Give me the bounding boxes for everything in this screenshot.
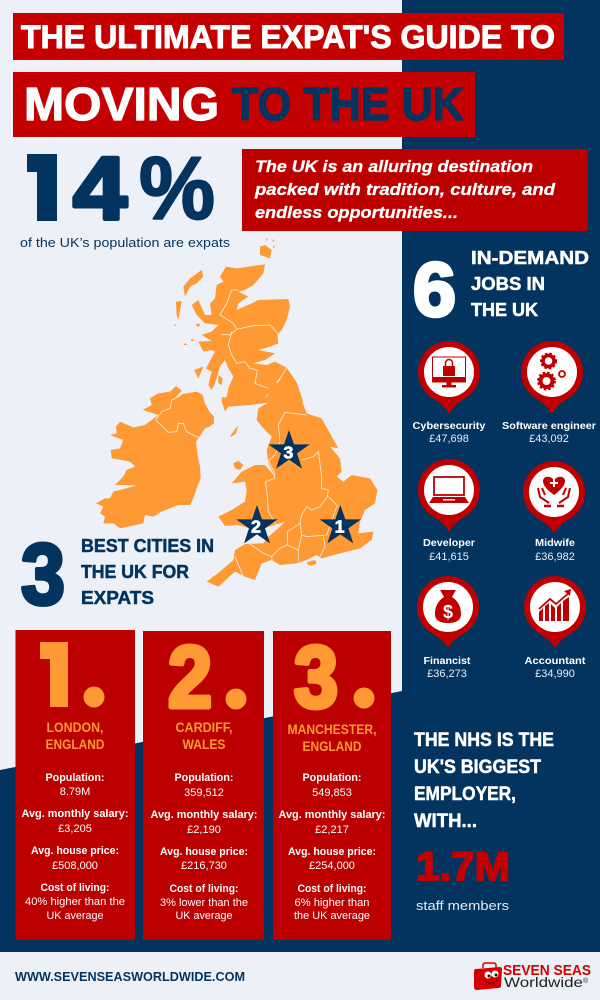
callout: intro text: endless opportunities... — [255, 203, 458, 222]
Cardiff stats: Avg. house price: — [160, 846, 248, 858]
job: Cybersecurity: Cybersecurity — [412, 420, 486, 432]
callout: NHS employer: EMPLOYER, — [414, 784, 516, 805]
heading: 3 best cities — [21, 527, 214, 623]
Cardiff stats: UK average — [176, 910, 232, 922]
statistic: 14 percent: of the UK’s population are expats — [20, 235, 231, 250]
Cardiff stats: £2,190 — [187, 824, 221, 836]
Manchester stats: Cost of living: — [298, 883, 366, 895]
logo: Seven Seas Worldwide: ® — [583, 977, 589, 985]
logo: Seven Seas Worldwide: Worldwide — [504, 974, 583, 990]
panel: London: ENGLAND — [46, 736, 104, 752]
callout: NHS employer: staff members — [416, 899, 509, 913]
number 3: 3 — [294, 629, 338, 726]
footer website: WWW.SEVENSEASWORLDWIDE.COM — [15, 969, 245, 984]
statistic: 14 percent: % — [139, 138, 215, 238]
panel: London: LONDON, — [46, 719, 104, 735]
map: Scottish islands — [174, 238, 275, 385]
job: Financist: Financist — [424, 655, 471, 667]
Manchester stats: Avg. monthly salary: — [278, 809, 386, 821]
job: Software engineer: Software engineer — [502, 420, 596, 432]
number 3 — [294, 629, 374, 726]
London stats: £508,000 — [52, 860, 98, 872]
Cardiff stats — [150, 772, 258, 922]
London stats: Avg. house price: — [31, 845, 119, 857]
panel: Manchester — [273, 629, 391, 940]
Cardiff stats: £216,730 — [181, 860, 227, 872]
title line 2: TO THE UK — [232, 78, 464, 130]
panel: London — [16, 627, 135, 940]
Cardiff stats: Cost of living: — [170, 883, 238, 895]
number 1 — [34, 627, 104, 724]
number 1: 1 — [41, 627, 67, 724]
panel: Cardiff — [143, 629, 264, 940]
job: Accountant — [524, 576, 586, 680]
star marker 1 — [320, 505, 361, 543]
icon: hands holding heart — [523, 461, 585, 533]
job: Midwife: Midwife — [535, 537, 575, 549]
map: England and Wales — [207, 383, 377, 587]
job: Software engineer — [502, 341, 596, 445]
Manchester stats: the UK average — [294, 910, 370, 922]
job: Developer: Developer — [423, 537, 475, 549]
heading: 6 in-demand jobs: IN-DEMAND — [471, 248, 589, 268]
London stats: Avg. monthly salary: — [22, 808, 128, 820]
Manchester stats: 549,853 — [312, 787, 352, 799]
job: Financist: £36,273 — [427, 668, 467, 680]
heading: 3 best cities: BEST CITIES IN — [81, 536, 214, 556]
panel: Manchester: ENGLAND — [302, 738, 362, 754]
heading: 6 in-demand jobs: 6 — [413, 248, 456, 333]
job: Developer: £41,615 — [429, 551, 469, 563]
map of the UK and Ireland — [96, 238, 377, 587]
statistic: 14 percent: 4 — [73, 138, 128, 238]
number 2 — [168, 629, 246, 726]
London stats — [22, 772, 128, 922]
callout: intro text: packed with tradition, culture, and — [254, 180, 556, 199]
heading: 6 in-demand jobs — [413, 248, 589, 333]
job: Midwife — [523, 461, 585, 563]
Manchester stats: £254,000 — [309, 860, 355, 872]
callout: NHS employer: 1.7M — [416, 845, 510, 889]
job: Midwife: £36,982 — [535, 551, 575, 563]
heading: 3 best cities: 3 — [21, 527, 65, 623]
heading: 3 best cities: THE UK FOR — [81, 562, 189, 582]
callout: NHS employer: UK'S BIGGEST — [414, 757, 541, 778]
Cardiff stats: Avg. monthly salary: — [150, 809, 258, 821]
London stats: Population: — [46, 772, 104, 784]
heading: 6 in-demand jobs: JOBS IN — [471, 274, 545, 294]
panel: Cardiff: CARDIFF, — [176, 719, 232, 735]
statistic: 14 percent — [20, 138, 231, 250]
title line 2: MOVING — [24, 78, 219, 130]
star marker 3 — [268, 430, 310, 469]
star marker 3: 3 — [283, 442, 293, 462]
icon: gears — [521, 341, 583, 414]
icon: red suitcase — [474, 963, 502, 990]
icon: monitor with padlock — [418, 341, 480, 414]
Manchester stats: Avg. house price: — [288, 846, 376, 858]
job: Financist — [417, 576, 479, 680]
heading: 3 best cities: EXPATS — [81, 588, 154, 608]
job: Software engineer: £43,092 — [529, 433, 569, 445]
Manchester stats — [278, 772, 386, 922]
London stats: Cost of living: — [40, 882, 110, 894]
Cardiff stats: Population: — [174, 772, 234, 784]
logo: Seven Seas Worldwide — [474, 963, 591, 990]
callout: NHS employer: WITH... — [414, 811, 477, 832]
London stats: UK average — [46, 910, 104, 922]
Cardiff stats: 3% lower than the — [160, 897, 248, 909]
Manchester stats: £2,217 — [315, 824, 349, 836]
job: Developer — [418, 459, 480, 563]
London stats: £3,205 — [58, 823, 92, 835]
job: Cybersecurity: £47,698 — [429, 433, 469, 445]
title — [13, 13, 564, 137]
icon: rising bar chart — [524, 576, 586, 648]
map: Ireland — [96, 386, 214, 528]
Cardiff stats: 359,512 — [184, 787, 224, 799]
callout: intro text — [242, 149, 588, 231]
job: Accountant: £34,990 — [535, 668, 575, 680]
map: Scotland — [174, 238, 303, 405]
statistic: 14 percent: 1 — [28, 138, 74, 238]
Manchester stats: 6% higher than — [294, 897, 370, 909]
map: Galloway, Isle of Man, Anglesey, Isle of Wight — [222, 397, 317, 566]
panel: Cardiff: WALES — [182, 736, 226, 752]
number 2: 2 — [168, 629, 212, 726]
Manchester stats: Population: — [302, 772, 362, 784]
title line 2 — [13, 72, 475, 137]
heading: 6 in-demand jobs: THE UK — [471, 300, 538, 320]
job: Accountant: Accountant — [524, 655, 586, 667]
logo: Seven Seas Worldwide: SEVEN SEAS — [503, 963, 591, 979]
London stats: 8.79M — [60, 786, 90, 798]
job: Cybersecurity — [412, 341, 486, 445]
callout: NHS employer: THE NHS IS THE — [414, 730, 554, 751]
callout: intro text: The UK is an alluring destination — [255, 157, 533, 176]
callout: NHS employer — [414, 730, 554, 913]
icon: laptop — [418, 459, 480, 532]
star marker 1: 1 — [335, 517, 345, 537]
title line 1: THE ULTIMATE EXPAT'S GUIDE TO — [21, 19, 555, 55]
icon: money bag: $ — [443, 602, 453, 622]
star marker 2 — [236, 505, 278, 543]
London stats: 40% higher than the — [25, 896, 125, 908]
star marker 2: 2 — [251, 517, 261, 537]
panel: Manchester: MANCHESTER, — [288, 721, 376, 737]
